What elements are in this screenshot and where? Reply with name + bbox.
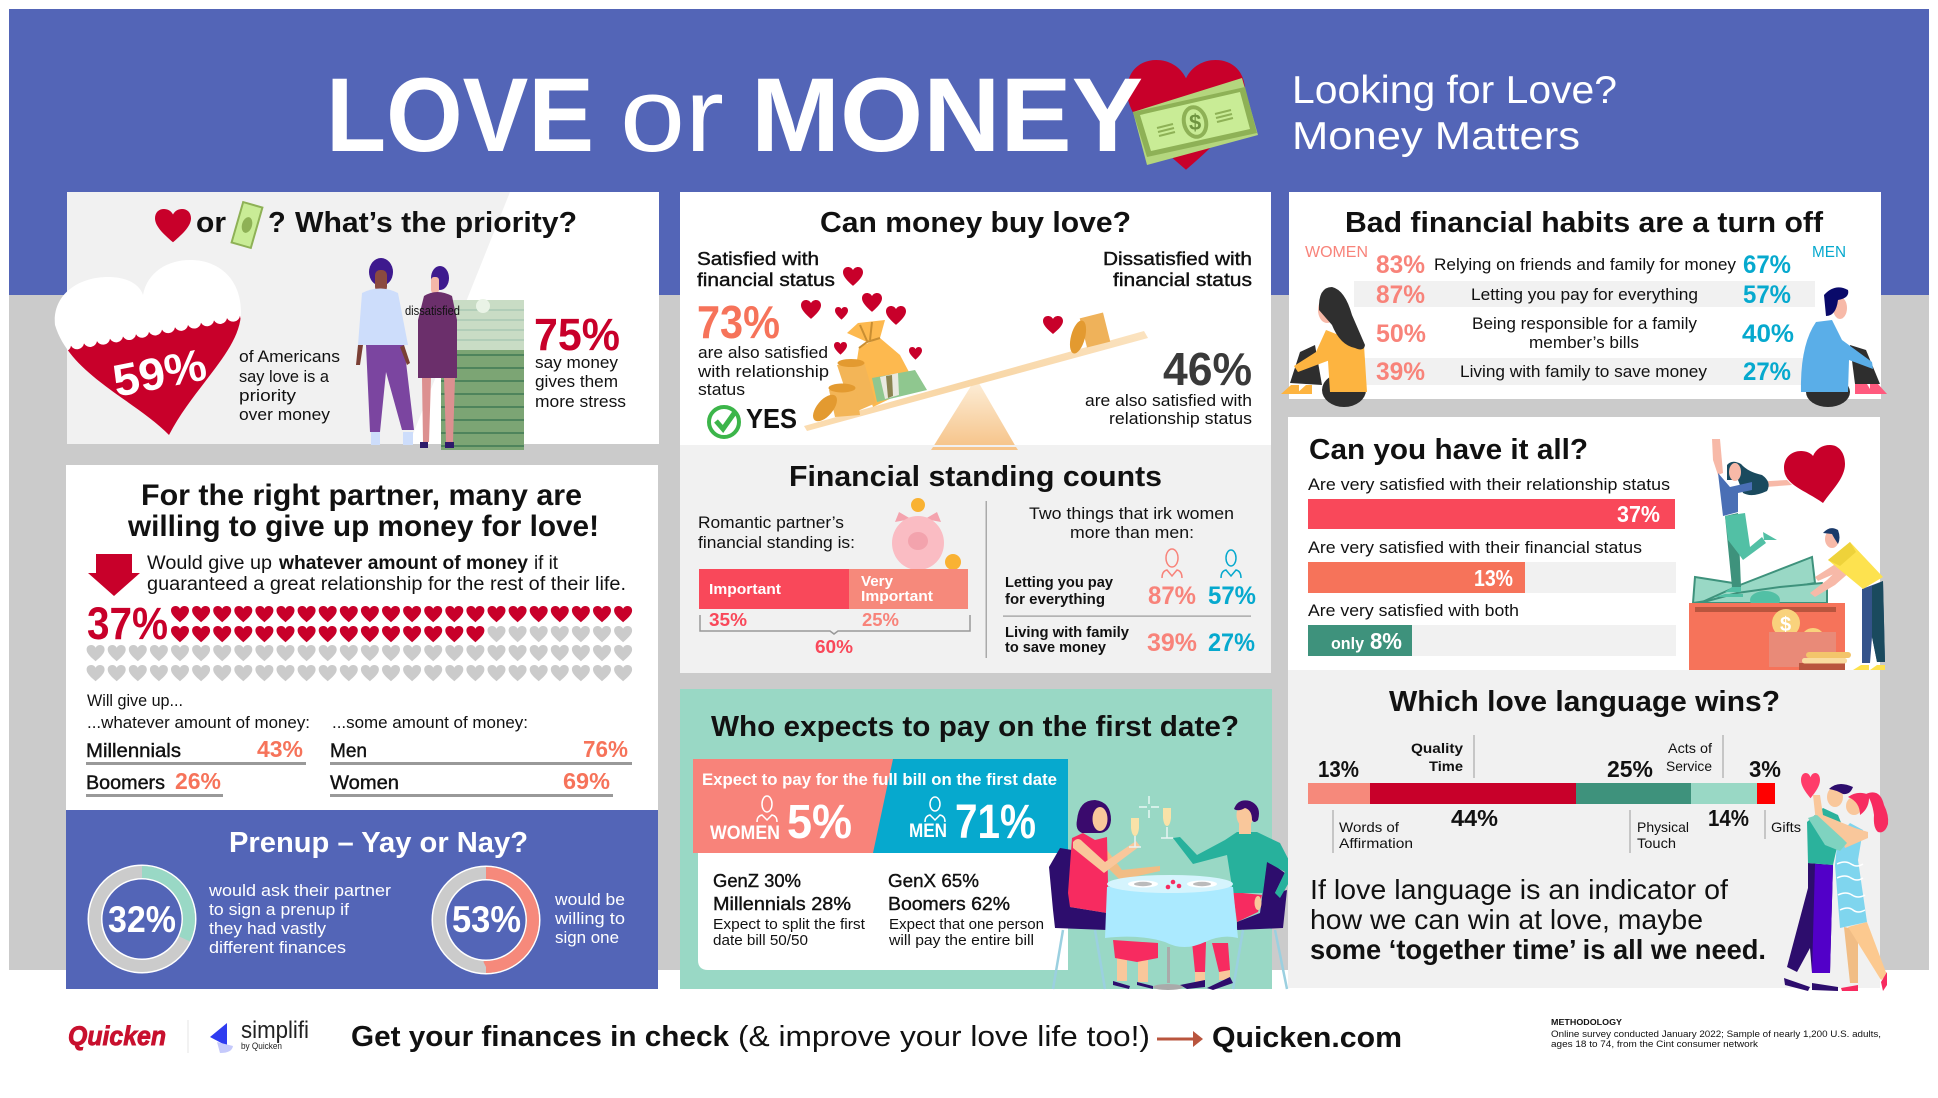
banner: full bill: 71% <box>955 796 1036 849</box>
illustration: sitting man <box>1801 287 1887 407</box>
illustration: sitting woman <box>1281 287 1367 407</box>
text: willing to sign: willing to <box>554 909 625 928</box>
icon: red down arrow <box>88 554 140 596</box>
title: or <box>620 57 724 174</box>
icon: big heart 59%: 59% <box>108 339 210 407</box>
text: would give up: whatever amount of money <box>278 553 528 574</box>
chart: stacked love-language bar: 14% <box>1708 805 1749 831</box>
text: romantic partner: financial standing is: <box>698 533 855 552</box>
stat: 46%: 46% <box>1163 343 1252 395</box>
heading: habits: Bad financial habits are a turn off <box>1345 207 1823 239</box>
heading: priority: ? <box>268 207 286 239</box>
table: habits: 40% <box>1742 320 1794 348</box>
chart: satisfaction bars: Are very satisfied with their relationship status <box>1308 475 1670 494</box>
text: will give up <box>87 691 528 732</box>
text: also satisfied right <box>1085 391 1252 428</box>
chart: satisfaction bars: Are very satisfied with both <box>1308 601 1519 620</box>
table: habits: 50% <box>1376 320 1426 348</box>
footer: methodology: Online survey conducted January 2022; Sample of nearly 1,200 U.S. adults, <box>1551 1029 1881 1039</box>
chart: stacked love-language bar: Quality <box>1411 740 1463 756</box>
table: irk comparison: for everything <box>1005 591 1105 608</box>
table: irk comparison: 27% <box>1208 629 1255 657</box>
chart: satisfaction bars: 13% <box>1474 565 1513 591</box>
heading: love language: Which love language wins? <box>1389 686 1780 718</box>
icon: green check yes <box>709 403 797 437</box>
chart: stacked love-language bar: Physical <box>1637 819 1689 835</box>
table: habits: 57% <box>1743 281 1791 309</box>
chart: stacked love-language bar: 13% <box>1318 756 1359 782</box>
text: romantic partner: Romantic partner’s <box>698 513 844 532</box>
text: genz millennials: date bill 50/50 <box>713 932 808 949</box>
chart: give-up bars: Boomers <box>86 773 165 794</box>
heading: priority: What’s the priority? <box>295 207 577 239</box>
footer: call to action: (& improve your love life too!) <box>738 1021 1150 1053</box>
banner: full bill: 5% <box>787 796 852 849</box>
icon: woman outline <box>1162 549 1182 578</box>
text: willing to sign: sign one <box>555 928 619 947</box>
heading: right partner: For the right partner, many are <box>141 479 582 512</box>
icon: heart behind title <box>1127 60 1245 170</box>
text: satisfied label: Satisfied with <box>697 249 819 269</box>
chart: stacked love-language bar: 25% <box>1607 756 1653 782</box>
text: will give up: Will give up... <box>87 691 183 710</box>
text: ask partner: different finances <box>209 938 346 957</box>
chart: stacked love-language bar: Service <box>1666 758 1712 774</box>
chart: satisfaction bars: 37% <box>1617 501 1660 527</box>
text: ask partner: they had vastly <box>209 919 327 938</box>
text: money stress: say money <box>535 353 619 372</box>
stat: 75%: 75% <box>534 309 620 360</box>
icons: floating hearts <box>801 267 1063 360</box>
table: habits: Living with family to save money <box>1460 362 1707 381</box>
table: irk comparison: 39% <box>1147 629 1197 657</box>
donut: 32% <box>95 872 189 966</box>
text: americans: of Americans <box>239 347 340 366</box>
text: together time: how we can win at love, maybe <box>1310 904 1703 935</box>
text: also satisfied: are also satisfied <box>698 343 828 362</box>
chart: stacked love-language bar: Time <box>1429 758 1463 774</box>
card: generations <box>698 853 1068 970</box>
chart: stacked love-language bar: 44% <box>1451 805 1498 831</box>
text: genz millennials: Expect to split the first <box>713 916 866 933</box>
chart: stacked love-language bar: Affirmation <box>1339 835 1413 851</box>
chart: give-up bars: 76% <box>583 736 628 762</box>
footer: call to action: Get your finances in check <box>351 1021 730 1053</box>
icon: dollar bill <box>1133 78 1258 165</box>
chart: give-up bars: 26% <box>175 768 221 794</box>
text: would give up: if it <box>534 553 559 574</box>
text: two things: more than men: <box>1070 523 1194 542</box>
text: also satisfied right: relationship status <box>1109 409 1252 428</box>
banner: full bill: MEN <box>909 821 947 842</box>
heading: priority: or <box>196 207 226 239</box>
text: would give up: Would give up <box>147 553 272 574</box>
text: romantic partner <box>698 513 855 552</box>
illustration: hugging couple <box>1784 773 1888 991</box>
donut: 32%: 32% <box>108 899 176 940</box>
background: gray band <box>9 295 1929 970</box>
chart: give-up bars: 69% <box>563 768 610 794</box>
heading: right partner <box>127 479 599 543</box>
divider <box>986 501 987 658</box>
chart: seesaw with money and coins <box>804 313 1148 447</box>
text: satisfied label <box>697 249 835 290</box>
text: together time: If love language is an indicator of <box>1310 874 1728 905</box>
chart: stacked love-language bar: 3% <box>1749 756 1781 782</box>
text: willing to sign <box>554 890 625 947</box>
text: together time: some ‘together time’ is all we need. <box>1310 934 1766 965</box>
subtitle: Money Matters <box>1292 115 1580 158</box>
table: habits: Relying on friends and family for money <box>1434 255 1736 274</box>
table: habits: 67% <box>1743 251 1791 279</box>
footer: methodology <box>1551 1017 1881 1049</box>
table: habits: 87% <box>1376 281 1425 309</box>
text: dissatisfied label: Dissatisfied with <box>1103 249 1252 269</box>
text: two things <box>1029 504 1234 542</box>
text: would give up: guaranteed a great relationship for the rest of their life. <box>147 574 626 595</box>
text: also satisfied: status <box>698 380 745 399</box>
text: ask partner: to sign a prenup if <box>209 900 349 919</box>
table: irk comparison: to save money <box>1005 639 1107 656</box>
icon: piggy bank <box>892 498 961 570</box>
chart: stacked importance bar: 35% <box>709 610 747 630</box>
donut: 53%: 53% <box>452 899 521 940</box>
panel: can you have it all <box>1288 417 1885 672</box>
footer: methodology: METHODOLOGY <box>1551 1017 1622 1027</box>
text: also satisfied right: are also satisfied with <box>1085 391 1252 410</box>
icon: money stack <box>441 299 524 450</box>
heading: financial standing: Financial standing counts <box>789 461 1162 493</box>
text: genz millennials: Millennials 28% <box>713 893 851 914</box>
icon: green check yes: YES <box>746 403 797 434</box>
text: dissatisfied label: financial status <box>1113 270 1252 290</box>
text: genx boomers <box>888 870 1044 949</box>
text: genx boomers: GenX 65% <box>888 870 979 891</box>
text: genx boomers: Expect that one person <box>889 916 1044 933</box>
text: ask partner <box>208 881 391 957</box>
text: satisfied label: financial status <box>697 270 835 290</box>
text: money stress: gives them <box>535 372 618 391</box>
icon: footer arrow <box>1157 1031 1203 1047</box>
panel: love languages <box>1288 670 1888 991</box>
chart: satisfaction bars <box>1308 475 1676 656</box>
table: habits <box>1354 251 1815 386</box>
chart: satisfaction bars: only <box>1331 634 1365 653</box>
banner: full bill: WOMEN <box>710 823 780 844</box>
footer: methodology: ages 18 to 74, from the Cint consumer network <box>1551 1039 1759 1049</box>
panel: prenup <box>66 810 658 989</box>
illustration: couple with wallet and heart: $ <box>1780 614 1791 636</box>
table: habits: Being responsible for a family <box>1472 314 1697 333</box>
heading: have it all: Can you have it all? <box>1309 434 1588 466</box>
table: irk comparison <box>1003 574 1256 657</box>
text: ask partner: would ask their partner <box>208 881 391 900</box>
text: will give up: ...some amount of money: <box>332 713 528 732</box>
footer: call to action <box>351 1021 1150 1053</box>
panel: bad financial habits <box>1281 192 1887 407</box>
panel: give up money for love <box>66 465 658 810</box>
chart: stacked importance bar <box>699 569 970 657</box>
panel: financial standing counts <box>680 445 1271 673</box>
chart: give-up bars <box>86 736 632 797</box>
text: genz millennials <box>713 870 866 949</box>
heading: buy love: Can money buy love? <box>820 207 1131 239</box>
chart: stacked love-language bar: Touch <box>1637 835 1676 851</box>
text: money stress: more stress <box>535 392 626 411</box>
icon: couple standing <box>356 258 457 448</box>
table: habits: 39% <box>1376 358 1425 386</box>
text: dissatisfied label <box>1103 249 1252 290</box>
chart: stacked love-language bar: Words of <box>1339 819 1399 835</box>
icon: big heart 59% <box>54 260 241 435</box>
background: blue header band <box>9 9 1929 295</box>
donut: 53% <box>439 873 533 967</box>
chart: give-up bars: Women <box>330 773 399 794</box>
text: genx boomers: Boomers 62% <box>888 893 1010 914</box>
stray label: dissatisfied: dissatisfied <box>405 304 460 318</box>
chart: stacked love-language bar: Acts of <box>1668 740 1712 756</box>
table: habits: 27% <box>1743 358 1791 386</box>
table: habits: 83% <box>1376 251 1425 279</box>
illustration: dinner date <box>1049 796 1295 990</box>
footer: quicken logo: Quicken <box>68 1021 166 1051</box>
chart: stacked love-language bar <box>1308 735 1801 853</box>
chart: stacked importance bar: Very <box>861 573 894 590</box>
illustration: couple with wallet and heart <box>1689 439 1885 672</box>
text: americans: over money <box>239 405 331 424</box>
heading: first date: Who expects to pay on the first date? <box>711 711 1239 743</box>
panel: first date <box>680 689 1295 990</box>
subtitle <box>1292 69 1617 158</box>
footer: simplifi logo: by Quicken <box>241 1041 282 1051</box>
chart: stacked love-language bar: Gifts <box>1771 819 1801 835</box>
chart: give-up bars: Men <box>330 741 367 762</box>
table: irk comparison: Letting you pay <box>1005 574 1114 591</box>
footer: logo divider <box>188 1020 189 1053</box>
text: two things: Two things that irk women <box>1029 504 1234 523</box>
chart: give-up bars: Millennials <box>86 741 181 762</box>
text: americans <box>239 347 340 424</box>
text: willing to sign: would be <box>554 890 625 909</box>
banner: full bill: Expect to pay for the full bill on the first date <box>702 770 1057 789</box>
footer: simplifi logo <box>210 1017 309 1053</box>
icon: man outline <box>1221 550 1241 578</box>
text: money stress <box>535 353 626 411</box>
chart: give-up bars: 43% <box>257 736 303 762</box>
table: irk comparison: Living with family <box>1005 624 1130 641</box>
banner: full bill <box>693 759 1068 853</box>
text: genz millennials: GenZ 30% <box>713 870 801 891</box>
text: americans: priority <box>239 386 297 405</box>
stat: 37%: 37% <box>87 598 168 649</box>
panel: what's the priority <box>40 192 659 450</box>
chart: stacked importance bar: Important <box>861 588 933 605</box>
text: also satisfied: with relationship <box>697 362 829 381</box>
table: irk comparison: 87% <box>1148 582 1196 610</box>
chart: stacked importance bar: Important <box>709 581 781 598</box>
stat: 73%: 73% <box>697 296 780 348</box>
table: habits: Letting you pay for everything <box>1471 285 1698 304</box>
table: irk comparison: 57% <box>1208 582 1256 610</box>
chart: satisfaction bars: Are very satisfied with their financial status <box>1308 538 1642 557</box>
heading: priority <box>155 202 577 248</box>
text: americans: say love is a <box>239 367 330 386</box>
chart: stacked importance bar: 60% <box>815 637 853 657</box>
footer: simplifi logo: simplifi <box>241 1017 309 1044</box>
subtitle: Looking for Love? <box>1292 69 1617 112</box>
title <box>326 57 1143 174</box>
text: together time <box>1310 874 1766 965</box>
text: will give up: ...whatever amount of money: <box>87 713 310 732</box>
label: women: WOMEN <box>1305 244 1368 261</box>
heading: prenup: Prenup – Yay or Nay? <box>229 827 528 859</box>
text: genx boomers: will pay the entire bill <box>888 932 1034 949</box>
pictogram: hearts grid <box>87 606 632 681</box>
table: habits: member’s bills <box>1529 333 1639 352</box>
panel: can money buy love <box>680 192 1271 447</box>
text: would give up <box>147 553 626 595</box>
footer: quicken.com: Quicken.com <box>1212 1022 1402 1054</box>
icon: dollar bill: $ <box>1189 110 1201 135</box>
text: also satisfied <box>697 343 829 399</box>
title: MONEY <box>751 57 1143 174</box>
label: men: MEN <box>1812 244 1846 261</box>
chart: satisfaction bars: 8% <box>1370 628 1402 654</box>
chart: stacked importance bar: 25% <box>862 610 899 630</box>
heading: right partner: willing to give up money for love! <box>127 510 599 543</box>
title: LOVE <box>326 57 594 174</box>
